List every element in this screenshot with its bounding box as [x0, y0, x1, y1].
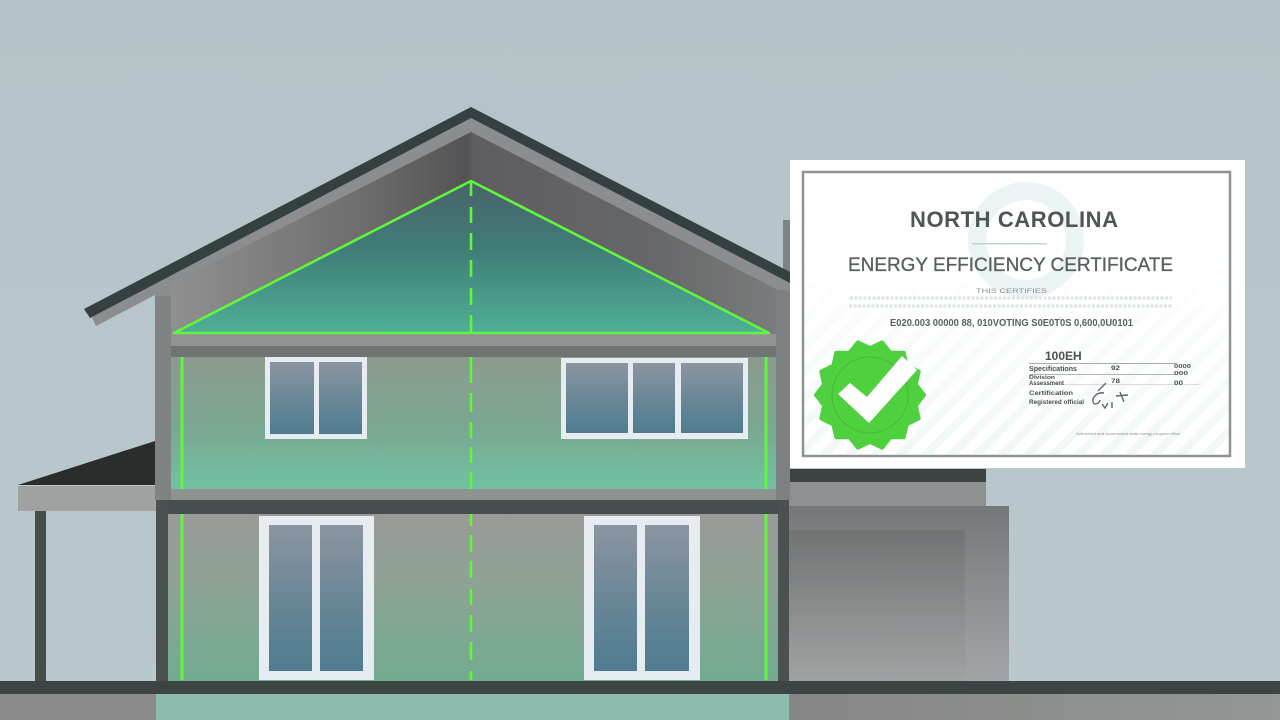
garage on the right — [783, 220, 1009, 682]
certificate rating table: 00 — [1174, 381, 1184, 387]
house body — [90, 114, 790, 682]
window upper left — [265, 357, 367, 439]
roof — [84, 107, 790, 318]
certificate rating table: Specifications — [1029, 366, 1077, 373]
diagonal stripe pattern — [804, 173, 1229, 454]
title divider — [972, 243, 1047, 244]
door lower left — [259, 516, 374, 680]
ground strip — [0, 693, 1280, 720]
roof underside band — [90, 114, 790, 326]
signature — [1093, 383, 1128, 408]
insulation outline lines — [182, 181, 766, 680]
certificate rating table: 0000 — [1174, 364, 1191, 370]
certificate rating table: 78 — [1111, 379, 1121, 385]
attic interior — [171, 130, 776, 335]
certificate title: NORTH CAROLINA — [910, 207, 1118, 232]
small heading: THIS CERTIFIES — [976, 289, 1047, 295]
certificate rating table: 100EH — [1045, 349, 1082, 363]
attic floor band — [171, 334, 776, 357]
lower floor wall — [168, 514, 778, 681]
icon: green seal with check — [816, 342, 924, 448]
window upper right — [561, 358, 748, 439]
fine print lines — [849, 298, 1173, 306]
certificate statement: E020.003 00000 88, 010VOTING S0E0T0S 0,600,0U0101 — [890, 318, 1133, 329]
porch on the left — [18, 441, 156, 682]
certificate rating table: Assessment — [1029, 381, 1064, 387]
insulation attic triangle — [174, 181, 769, 333]
upper floor wall — [171, 357, 776, 490]
certificate subtitle: ENERGY EFFICIENCY CERTIFICATE — [848, 255, 1173, 276]
certificate rating table: Registered official — [1029, 400, 1084, 406]
lower wall posts — [156, 500, 789, 682]
certificate rating table: Division — [1029, 375, 1055, 381]
door lower right — [584, 516, 700, 680]
mid floor band — [156, 489, 789, 514]
certificate rating table — [1029, 349, 1199, 406]
panel: certificate — [790, 160, 1245, 468]
certificate border — [803, 172, 1230, 456]
signature footnote: Authorized and documented state energy program office — [1076, 431, 1181, 436]
certificate rating table: 000 — [1174, 371, 1188, 377]
watermark ring — [977, 191, 1075, 289]
certificate rating table: Certification — [1029, 390, 1073, 397]
ground line — [0, 681, 1280, 694]
certificate rating table: 92 — [1111, 366, 1121, 372]
wall columns — [155, 290, 171, 500]
